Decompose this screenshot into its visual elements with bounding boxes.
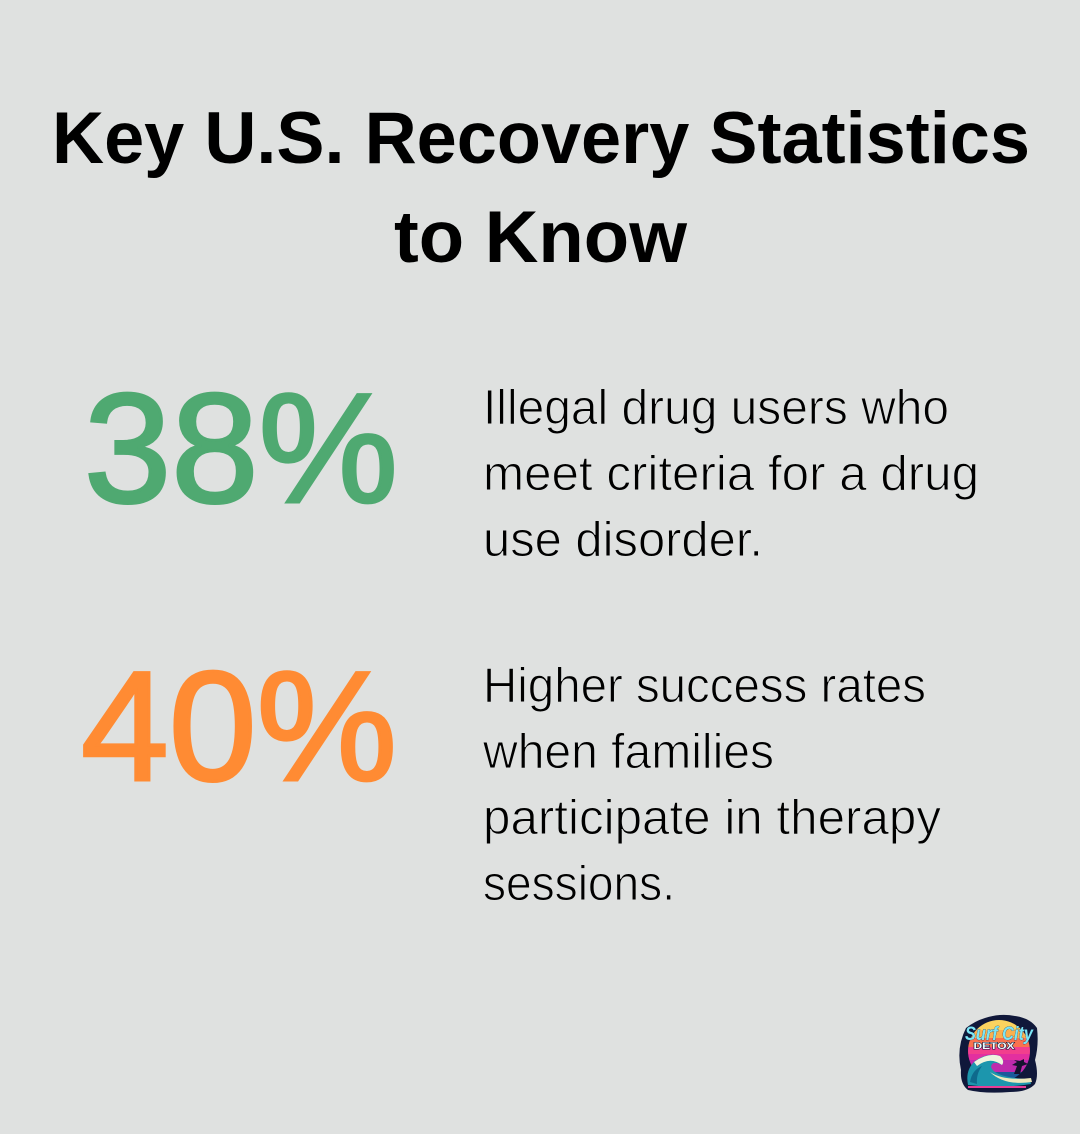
stat description: family therapy	[482, 659, 941, 911]
stat description: drug use disorder: meet criteria for a drug	[483, 447, 979, 501]
icon: Surf City Detox logo	[959, 1015, 1038, 1093]
title	[52, 98, 1030, 278]
stat: 38%	[84, 362, 979, 567]
stat description: drug use disorder: use disorder.	[483, 513, 763, 567]
stat number: 38%: 38%	[84, 362, 398, 536]
stat description: family therapy: participate in therapy	[483, 791, 941, 845]
stat: 40%	[81, 640, 941, 911]
stat description: family therapy: Higher success rates	[483, 659, 926, 713]
stat description: drug use disorder: Illegal drug users who	[483, 381, 949, 435]
icon: Surf City Detox logo: Surf City	[965, 1024, 1034, 1045]
icon: Surf City Detox logo: DETOX	[974, 1041, 1014, 1051]
palm	[1012, 1059, 1028, 1074]
wave	[967, 1055, 1031, 1087]
stat description: family therapy: sessions.	[483, 857, 675, 911]
title: Key U.S. Recovery Statistics	[52, 98, 1030, 179]
stat number: 40%: 40%	[81, 640, 397, 814]
stat description: family therapy: when families	[482, 725, 774, 779]
stat description: drug use disorder	[483, 381, 979, 567]
title: to Know	[394, 197, 687, 278]
